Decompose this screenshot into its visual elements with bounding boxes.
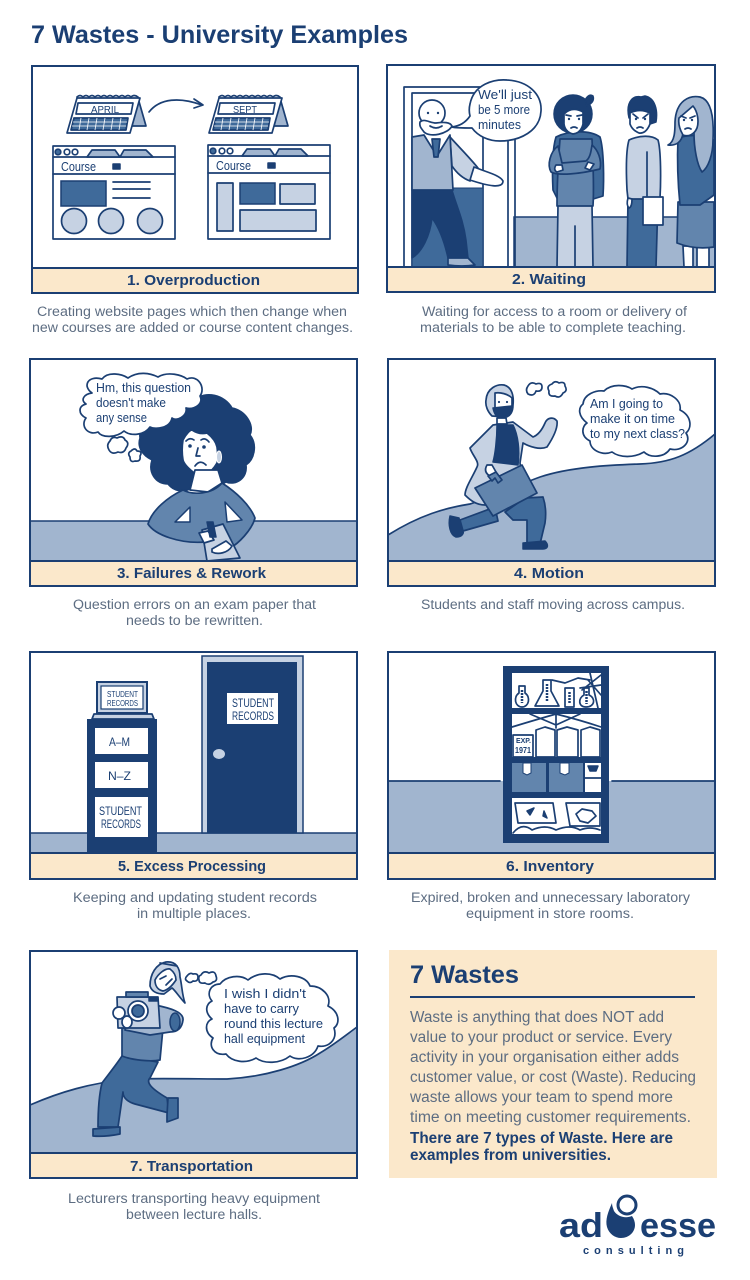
- floor: [388, 781, 715, 853]
- summary heading: 7 Wastes: [410, 961, 519, 989]
- caption 5: Keeping and updating student records: [73, 890, 317, 905]
- banner label: [388, 853, 715, 879]
- logo: adOesse consulting: ad: [559, 1207, 603, 1245]
- banner label: 2. Waiting: [512, 271, 586, 288]
- caption 3: needs to be rewritten.: [126, 613, 263, 628]
- thought cloud: Hm, this question: [96, 381, 191, 395]
- banner label: 5. Excess Processing: [118, 858, 266, 875]
- bottom shelf: broken monitors: [512, 798, 601, 834]
- logo: adOesse consulting: [559, 1196, 716, 1257]
- caption 2: materials to be able to complete teaching.: [420, 320, 686, 335]
- running lecturer: [449, 385, 557, 549]
- caption 7: [68, 1191, 320, 1222]
- second shelf: covered containers: [512, 714, 601, 757]
- arrow: [149, 99, 203, 112]
- browser window: first version: [53, 146, 175, 239]
- filing cabinet with computer: STUDENT: [107, 690, 138, 699]
- thought cloud: round this lecture: [224, 1017, 323, 1031]
- banner label: [387, 267, 715, 292]
- filing cabinet with computer: [87, 682, 157, 853]
- office door with sign: RECORDS: [232, 709, 274, 723]
- caption 6: equipment in store rooms.: [466, 906, 634, 921]
- banner label: [30, 853, 357, 879]
- filing cabinet with computer: RECORDS: [107, 699, 138, 708]
- banner label: [30, 1153, 357, 1178]
- doorway: [404, 87, 515, 267]
- lecturer figure: [412, 100, 503, 266]
- top shelf: flasks: [512, 673, 601, 708]
- floor: [30, 833, 357, 853]
- panel: 7 Wastes summary: [389, 950, 717, 1178]
- thought cloud: any sense: [96, 411, 147, 425]
- thought cloud: to my next class?: [590, 427, 685, 441]
- banner label: 3. Failures & Rework: [117, 565, 267, 582]
- speech bubble: We'll just: [478, 88, 533, 102]
- hill: [30, 1027, 357, 1153]
- small thought clouds: [108, 437, 141, 462]
- summary body text: [409, 1009, 696, 1164]
- summary body text: waste allows your team to spend more: [409, 1089, 673, 1106]
- panel: 7. Transportation: [30, 951, 357, 1178]
- person carrying equipment: [93, 962, 185, 1136]
- thought cloud: Am I going to: [590, 397, 663, 411]
- panel: 1. Overproduction: [32, 66, 358, 293]
- banner label: 6. Inventory: [506, 858, 595, 875]
- banner label: 7. Transportation: [130, 1158, 253, 1175]
- second shelf: covered containers: 1971: [515, 746, 531, 755]
- store room shelving unit: [503, 666, 609, 843]
- woman reading exam paper: [139, 395, 255, 561]
- browser window: changed version: [208, 145, 330, 239]
- banner label: [30, 561, 357, 586]
- summary body text: Waste is anything that does NOT add: [410, 1009, 664, 1026]
- icon: April calendar: APRIL: [91, 105, 119, 116]
- summary body text: time on meeting customer requirements.: [410, 1109, 691, 1126]
- hill: [388, 434, 715, 561]
- icon: September calendar: SEPT: [233, 105, 257, 116]
- caption 1: new courses are added or course content changes.: [32, 320, 353, 335]
- thought cloud: I wish I didn't: [224, 987, 307, 1001]
- caption 5: [73, 890, 317, 921]
- title: 7 Wastes - University Examples: [31, 21, 408, 49]
- banner label: 1. Overproduction: [127, 272, 260, 289]
- wall base: [514, 217, 715, 267]
- filing cabinet with computer: RECORDS: [101, 817, 141, 831]
- speech bubble: [452, 80, 541, 141]
- speech bubble: minutes: [478, 118, 521, 132]
- thought cloud: [80, 373, 202, 436]
- banner label: [388, 561, 715, 586]
- filing cabinet with computer: A–M: [109, 735, 130, 749]
- filing cabinet with computer: STUDENT: [99, 804, 143, 818]
- student with long hair: [668, 97, 714, 267]
- summary body text: There are 7 types of Waste. Here are: [410, 1130, 673, 1147]
- browser window: first version: Course: [61, 159, 96, 174]
- panel: 3. Failures and Rework: [30, 359, 357, 586]
- thought cloud: have to carry: [224, 1002, 300, 1016]
- third shelf: boxes: [512, 763, 601, 792]
- thought cloud: [580, 386, 690, 456]
- panel: 2. Waiting: [387, 65, 715, 292]
- banner label: [32, 268, 358, 293]
- caption 1: [32, 304, 353, 335]
- caption 6: Expired, broken and unnecessary laboratory: [411, 890, 690, 905]
- caption 2: [420, 304, 687, 335]
- caption 7: Lecturers transporting heavy equipment: [68, 1191, 320, 1206]
- logo: adOesse consulting: esse: [640, 1207, 716, 1245]
- thought cloud: doesn't make: [96, 396, 166, 410]
- caption 1: Creating website pages which then change when: [37, 304, 347, 319]
- student with paper: [626, 96, 663, 267]
- caption 6: [411, 890, 690, 921]
- summary body text: value to your product or service. Every: [410, 1029, 672, 1046]
- summary body text: examples from universities.: [410, 1147, 611, 1164]
- banner label: 4. Motion: [514, 565, 584, 582]
- icon: September calendar: [209, 96, 288, 133]
- panel: 6. Inventory: [388, 652, 715, 879]
- logo: adOesse consulting: consulting: [583, 1245, 684, 1257]
- icon: April calendar: [67, 96, 146, 133]
- panel: 5. Excess Processing: [30, 652, 357, 879]
- floor: [30, 521, 357, 561]
- summary body text: activity in your organisation either adds: [410, 1049, 679, 1066]
- browser window: changed version: Course: [216, 158, 251, 173]
- thought cloud: make it on time: [590, 412, 675, 426]
- caption 5: in multiple places.: [137, 906, 251, 921]
- second shelf: covered containers: EXP.: [516, 738, 531, 745]
- small thought clouds: [526, 382, 566, 397]
- thought cloud: hall equipment: [224, 1032, 306, 1046]
- office door with sign: [202, 656, 303, 833]
- caption 4: Students and staff moving across campus.: [421, 597, 685, 612]
- caption 3: [73, 597, 316, 628]
- speech bubble: be 5 more: [478, 103, 530, 117]
- student with backpack: [549, 95, 604, 267]
- summary body text: customer value, or cost (Waste). Reducing: [410, 1069, 696, 1086]
- filing cabinet with computer: N–Z: [108, 769, 131, 783]
- thought cloud: [206, 974, 338, 1062]
- caption 7: between lecture halls.: [126, 1207, 262, 1222]
- caption 2: Waiting for access to a room or delivery of: [422, 304, 687, 319]
- panel: 4. Motion: [388, 359, 715, 586]
- caption 3: Question errors on an exam paper that: [73, 597, 316, 612]
- small thought clouds: [186, 972, 217, 984]
- office door with sign: STUDENT: [232, 696, 274, 710]
